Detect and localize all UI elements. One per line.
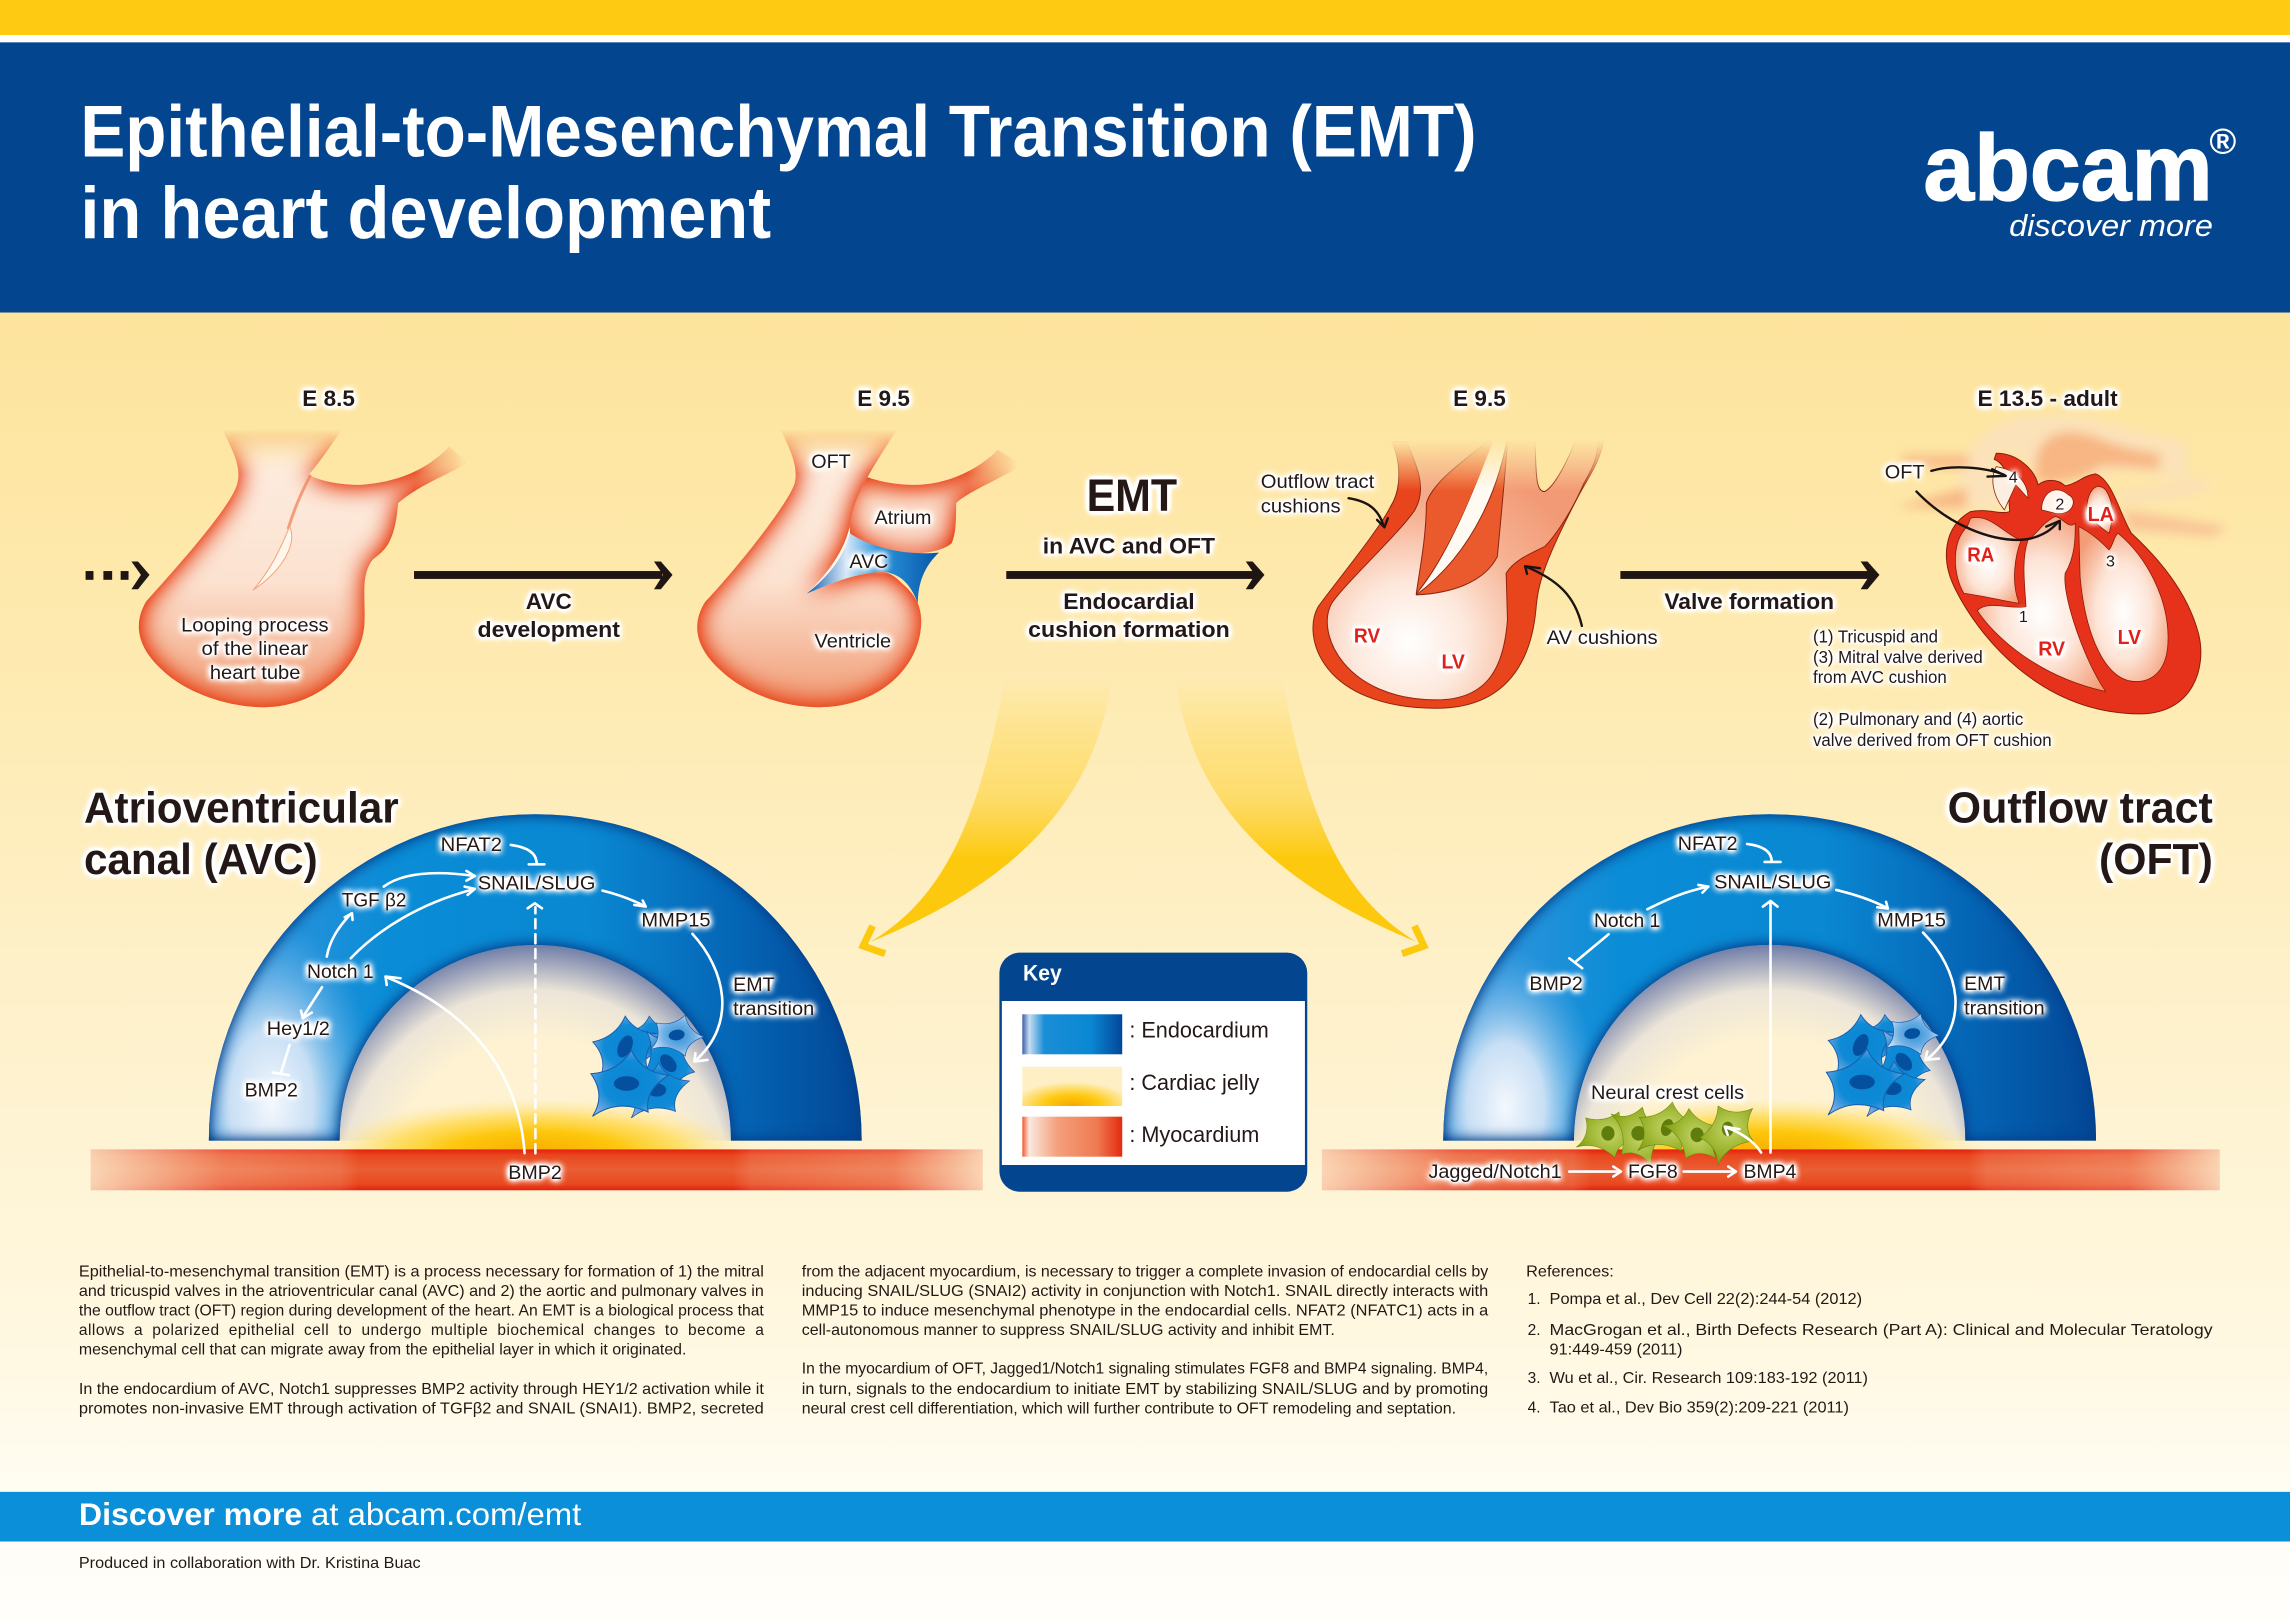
abcam logo: discover more [2009, 209, 2213, 243]
neural crest cells [1575, 1092, 1769, 1173]
heart: adult four chambers [1896, 415, 2227, 714]
body text column 2: cell-autonomous manner to suppress SNAIL/SLUG activity and inhibit EMT. [802, 1322, 1335, 1339]
heart: E 9.5 with atrium, AVC and ventricle [697, 430, 1023, 707]
heart 4 labels: 1 [2019, 608, 2028, 626]
heart labels: OFT, Atrium, AVC, Ventricle: AVC [850, 551, 888, 573]
heart 3 annotations: Outflow tract [1261, 471, 1375, 493]
AVC pathway labels: TGF β2 [342, 890, 406, 912]
references: 1. [1528, 1291, 1541, 1308]
label: valve formation: Valve formation [1664, 589, 1834, 614]
EMT central heading: in AVC and OFT [1043, 534, 1216, 559]
stage label: E 13.5 adult: E 13.5 - adult [1977, 386, 2118, 411]
heart 4 labels: 4 [2009, 469, 2018, 487]
heart label: looping process: of the linear [202, 638, 309, 660]
heading: Atrioventricular canal: canal (AVC) [84, 835, 318, 884]
body text column 2: in turn, signals to the endocardium to initiate EMT by stabilizing SNAIL/SLUG and by promoting [802, 1381, 1488, 1398]
heart label: looping process [181, 615, 329, 684]
heart: E 9.5 with cushions [1313, 430, 1606, 708]
pointer arrows to cushions [1349, 498, 1582, 626]
references: Tao et al., Dev Bio 359(2):209-221 (2011) [1550, 1399, 1849, 1416]
EMT central heading [1028, 470, 1230, 642]
heart 3 annotations: RV [1354, 625, 1380, 648]
references: 91:449-459 (2011) [1550, 1341, 1682, 1358]
footer bar [0, 1492, 2290, 1542]
body text column 2: In the myocardium of OFT, Jagged1/Notch1 signaling stimulates FGF8 and BMP4 signaling. BMP4, [802, 1361, 1488, 1378]
big yellow arrow to OFT [1176, 679, 1424, 954]
OFT pathway labels: Notch 1 [1594, 910, 1660, 932]
body text column 2: MMP15 to induce mesenchymal phenotype in the endocardial cells. NFAT2 (NFATC1) acts in a [802, 1303, 1489, 1320]
key: cardiac jelly [1022, 1067, 1259, 1106]
stage label: E 9.5 cushions: E 9.5 [1453, 386, 1506, 411]
label: AVC development: development [478, 617, 621, 642]
stage label: E 9.5 AVC: E 9.5 [857, 386, 910, 411]
key panel [999, 953, 1307, 1192]
heart labels: OFT, Atrium, AVC, Ventricle: OFT [811, 451, 851, 473]
EMT central heading: EMT [1087, 470, 1177, 521]
OFT pathway arrows [1569, 844, 1956, 1177]
endocardium arch [1443, 814, 2096, 1141]
cardiac jelly [1562, 945, 1977, 1150]
body text column 1: and tricuspid valves in the atrioventricular canal (AVC) and 2) the aortic and pulmonary valves in [79, 1283, 764, 1300]
body text column 2: from the adjacent myocardium, is necessary to trigger a complete invasion of endocardial cells by [802, 1263, 1488, 1280]
heart 4 labels: LV [2118, 626, 2141, 649]
body text column 1: allows a polarized epithelial cell to undergo multiple biochemical changes to become a [79, 1322, 764, 1339]
heart 4 labels: OFT [1885, 461, 1925, 483]
heart 3 annotations [1261, 471, 1658, 674]
heading: Outflow tract [1948, 784, 2213, 884]
AVC pathway arrows [273, 845, 722, 1153]
big yellow arrow to AVC [863, 679, 1111, 954]
arrow: valve formation [1620, 562, 1879, 589]
heart 4 labels: RA [1967, 544, 1994, 567]
arrow: AVC development [414, 562, 673, 589]
valve notes: (1) Tricuspid and [1813, 627, 1938, 647]
valve notes: (2) Pulmonary and (4) aortic [1813, 709, 2024, 729]
EMT central heading: Endocardial [1063, 589, 1195, 614]
footer bar: Discover more [79, 1497, 302, 1532]
references: 3. [1528, 1370, 1541, 1387]
body text column 1: mesenchymal cell that can migrate away from the epithelial layer in which it originated. [79, 1342, 686, 1359]
heart labels: OFT, Atrium, AVC, Ventricle: Ventricle [814, 631, 891, 653]
label: AVC development: AVC [526, 589, 572, 614]
body text column 1: promotes non-invasive EMT through activation of TGFβ2 and SNAIL (SNAI1). BMP2, secreted [79, 1401, 764, 1418]
references: 4. [1528, 1399, 1541, 1416]
heart 3 annotations: AV cushions [1547, 627, 1658, 649]
body text column 1: Epithelial-to-mesenchymal transition (EMT) is a process necessary for formation of 1) the mitral [79, 1263, 764, 1280]
OFT pathway labels: EMT [1964, 973, 2005, 995]
abcam logo: abcam [1923, 115, 2213, 220]
header [0, 0, 2290, 313]
references: References: [1526, 1263, 1614, 1280]
footer bar: at abcam.com/emt [311, 1497, 582, 1532]
migrating endocardial cells [590, 1009, 708, 1118]
OFT pathway labels: BMP4 [1743, 1161, 1796, 1183]
EMT central heading: cushion formation [1028, 617, 1230, 642]
references: MacGrogan et al., Birth Defects Research (Part A): Clinical and Molecular Teratology [1550, 1322, 2213, 1339]
arrow: EMT [1006, 562, 1264, 589]
title: in heart development [80, 173, 771, 254]
AVC pathway labels: BMP2 [508, 1162, 562, 1184]
AVC pathway labels: MMP15 [641, 910, 711, 932]
OFT pathway labels: Jagged/Notch1 [1428, 1161, 1562, 1183]
OFT pathway labels: transition [1964, 997, 2045, 1019]
endocardium arch [208, 814, 862, 1141]
heading: Outflow tract: Outflow tract [1948, 784, 2213, 833]
OFT pathway labels: Neural crest cells [1591, 1082, 1744, 1104]
OFT pathway labels: SNAIL/SLUG [1714, 871, 1831, 893]
heart labels: OFT, Atrium, AVC, Ventricle [811, 451, 931, 653]
title: Epithelial-to-Mesenchymal Transition (EMT) [80, 91, 1477, 172]
valve notes [1813, 627, 2052, 750]
diagram: OFT arch [1322, 814, 2220, 1190]
heart label: looping process: Looping process [181, 615, 329, 637]
key heading: Key [1023, 961, 1063, 986]
OFT pathway labels: FGF8 [1628, 1161, 1678, 1183]
heart: looping linear tube E 8.5 [139, 430, 468, 707]
abcam logo: ® [2209, 120, 2236, 161]
AVC pathway labels: NFAT2 [441, 834, 502, 856]
AVC pathway labels: transition [733, 998, 814, 1020]
OFT pathway labels [1428, 833, 2045, 1183]
references [1526, 1263, 2213, 1416]
body text column 2 [802, 1263, 1489, 1418]
AVC pathway labels: BMP2 [245, 1080, 298, 1102]
AVC pathway labels: SNAIL/SLUG [478, 872, 595, 894]
AVC pathway labels: Hey1/2 [267, 1018, 330, 1040]
valve notes: (3) Mitral valve derived [1813, 647, 1983, 667]
heart 4 labels: RV [2038, 638, 2065, 661]
label: AVC development [478, 589, 621, 642]
references: 2. [1528, 1322, 1541, 1339]
cardiac jelly [328, 945, 742, 1150]
heart 3 annotations: cushions [1261, 496, 1341, 518]
OFT pathway labels: MMP15 [1877, 910, 1946, 932]
heading: Outflow tract: (OFT) [2099, 835, 2213, 884]
heart 4 labels [1885, 461, 2141, 661]
key: cardiac jelly: : Cardiac jelly [1129, 1070, 1259, 1095]
heart 3 annotations: LV [1441, 651, 1465, 674]
body text column 2: inducing SNAIL/SLUG (SNAI2) activity in conjunction with Notch1. SNAIL directly interacts with [802, 1283, 1488, 1300]
migrating endocardial cells [1825, 1007, 1943, 1117]
key: endocardium [1022, 1014, 1269, 1054]
myocardium band [91, 1149, 983, 1190]
AVC pathway labels: EMT [733, 974, 775, 996]
references: Pompa et al., Dev Cell 22(2):244-54 (2012) [1550, 1291, 1862, 1308]
credit line: Produced in collaboration with Dr. Kristina Buac [79, 1555, 421, 1572]
key: endocardium: : Endocardium [1129, 1017, 1269, 1042]
body text column 1: the outflow tract (OFT) region during development of the heart. An EMT is a biological process that [79, 1303, 765, 1320]
heading: Atrioventricular canal: Atrioventricular [84, 784, 399, 833]
myocardium band [1322, 1149, 2220, 1190]
valve notes: valve derived from OFT cushion [1813, 730, 2052, 750]
key: myocardium [1022, 1117, 1259, 1157]
dotted arrow: start of development [86, 562, 150, 589]
AVC pathway labels [245, 834, 814, 1184]
heart 4 labels: 3 [2106, 553, 2115, 571]
heart 4 labels: 2 [2055, 495, 2064, 513]
body text column 1 [79, 1263, 765, 1418]
valve notes: from AVC cushion [1813, 667, 1947, 687]
heart labels: OFT, Atrium, AVC, Ventricle: Atrium [875, 507, 931, 529]
body text column 1: In the endocardium of AVC, Notch1 suppresses BMP2 activity through HEY1/2 activation while it [79, 1381, 765, 1398]
stage label: E 8.5: E 8.5 [302, 386, 355, 411]
pointer arrows from OFT to valves [1916, 467, 2060, 540]
OFT pathway labels: BMP2 [1529, 973, 1583, 995]
heart label: looping process: heart tube [210, 662, 301, 684]
key: myocardium: : Myocardium [1129, 1122, 1259, 1147]
references: Wu et al., Cir. Research 109:183-192 (2011) [1550, 1370, 1868, 1387]
heading: Atrioventricular canal [84, 784, 399, 884]
heart 4 labels: LA [2088, 503, 2114, 526]
OFT pathway labels: NFAT2 [1678, 833, 1738, 855]
AVC pathway labels: Notch 1 [307, 961, 374, 983]
body text column 2: neural crest cell differentiation, which will further contribute to OFT remodeling and septation. [802, 1401, 1456, 1418]
title [80, 91, 1477, 254]
diagram: AVC arch [90, 814, 983, 1190]
